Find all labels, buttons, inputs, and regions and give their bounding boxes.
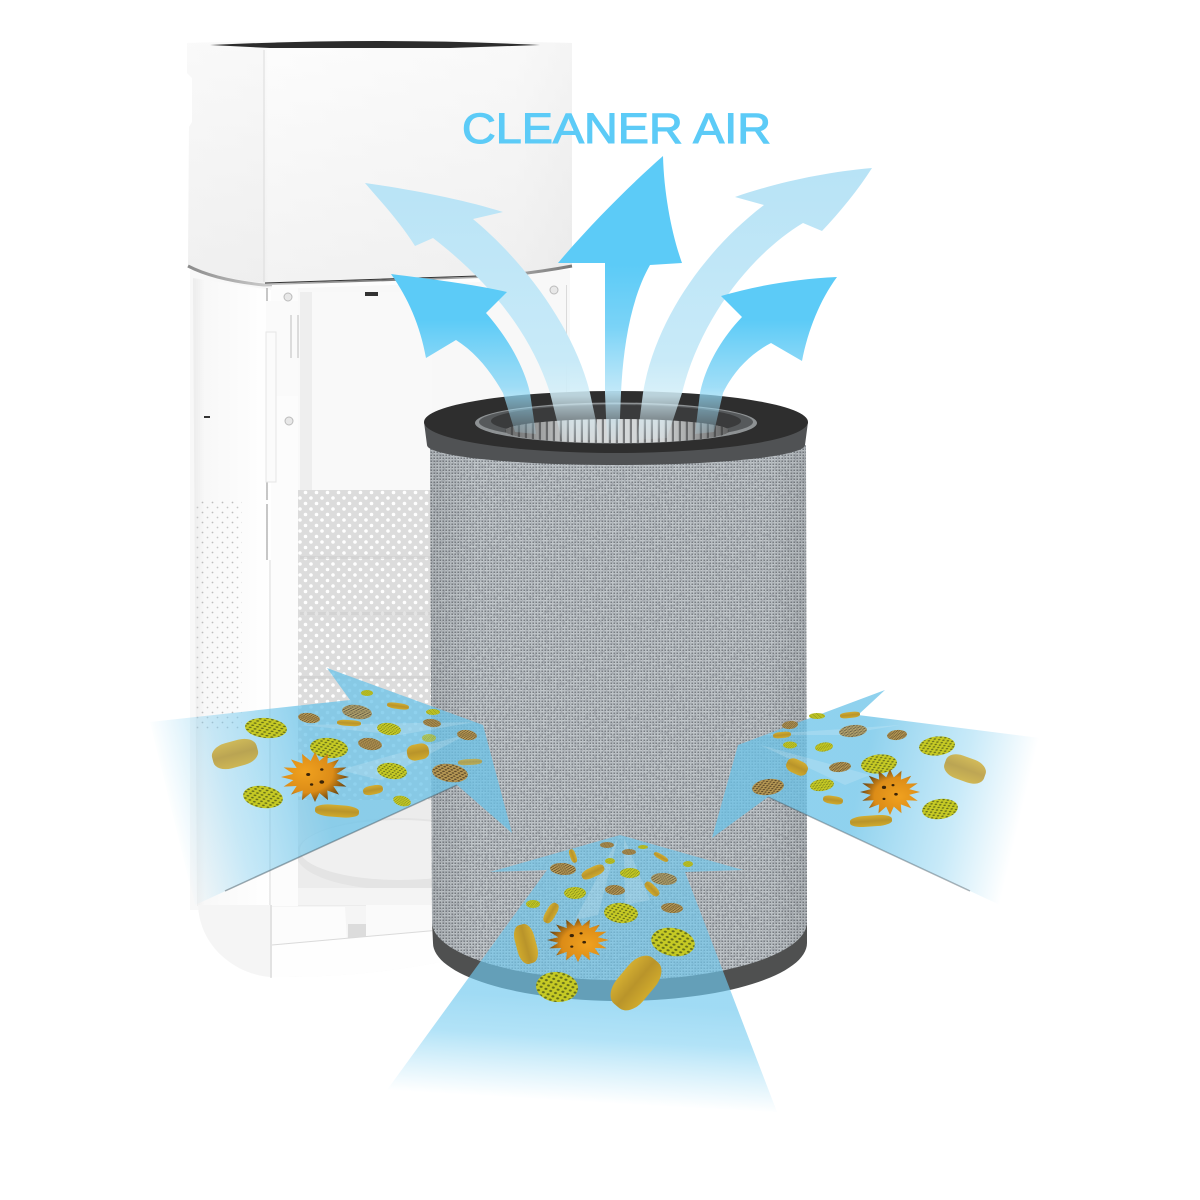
right arrow light streaks bbox=[755, 725, 900, 785]
heading: CLEANER AIR bbox=[462, 105, 771, 153]
arrow: inner left bbox=[391, 274, 536, 434]
arrow: outer right light bbox=[637, 168, 872, 440]
bottom arrow shape bbox=[387, 835, 777, 1112]
filter cartridge bbox=[424, 391, 808, 1001]
left arrow light streaks bbox=[300, 722, 475, 780]
right arrow shadow edge bbox=[768, 797, 970, 891]
bottom band bbox=[432, 922, 807, 1001]
bottom arrow light streaks bbox=[575, 838, 650, 920]
air purifier with door removed bbox=[187, 40, 572, 978]
left arrow shadow edge bbox=[225, 785, 457, 891]
grey rim lip bbox=[424, 422, 808, 465]
bottom particles bbox=[511, 842, 697, 1017]
purifier upper housing bbox=[187, 40, 572, 287]
arrow: outer left light bbox=[365, 183, 600, 441]
mesh body bbox=[430, 445, 807, 983]
left arrow shape bbox=[150, 668, 512, 905]
arrow: centre bbox=[558, 156, 682, 440]
black foam top bbox=[424, 391, 808, 453]
right arrow shape bbox=[712, 690, 1040, 905]
right particles bbox=[751, 711, 989, 828]
clean air arrows bbox=[365, 156, 872, 441]
arrow: right polluted air with particles bbox=[712, 690, 1040, 905]
purifier lower column and base bbox=[190, 270, 570, 978]
filter opening with pleats bbox=[475, 402, 757, 444]
arrow: inner right bbox=[695, 277, 837, 434]
door latch details bbox=[204, 286, 558, 482]
arrow: bottom polluted air with particles bbox=[387, 835, 777, 1112]
arrow: left polluted air with particles bbox=[150, 668, 512, 905]
left particles bbox=[209, 690, 482, 819]
